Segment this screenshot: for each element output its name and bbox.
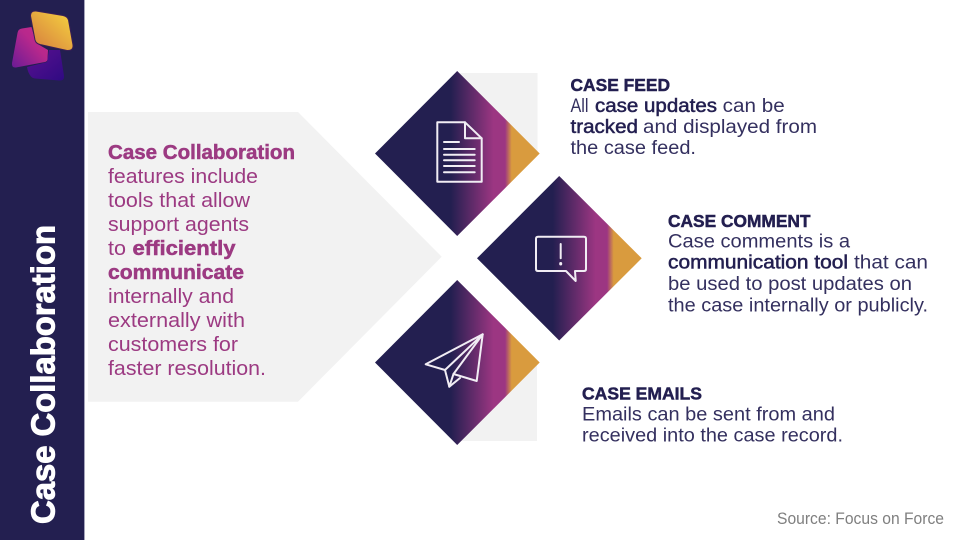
intro text: features include — [108, 165, 258, 188]
icon: document — [437, 122, 482, 182]
intro text: customers for — [108, 333, 238, 356]
text block: case feed — [570, 75, 817, 159]
backing square: case emails — [457, 362, 537, 441]
icon: speech bubble with exclamation mark — [536, 237, 586, 281]
text block: case feed: All — [570, 96, 588, 117]
icon: paper plane — [426, 334, 483, 387]
panel: intro arrow — [88, 112, 442, 402]
intro text: to — [108, 237, 126, 260]
diamond: case comment — [477, 176, 642, 340]
intro text: support agents — [108, 213, 249, 236]
text block: case emails: received into the case record. — [582, 426, 843, 446]
icon: logo of stacked cards — [12, 11, 73, 81]
text block: case comment — [668, 211, 928, 316]
source note: Source: Focus on Force — [777, 510, 944, 528]
text block: case emails — [582, 384, 843, 446]
intro text: tools that allow — [108, 189, 250, 212]
text block: case feed: CASE FEED — [570, 75, 670, 95]
intro text: externally with — [108, 309, 245, 332]
text block: case emails: CASE EMAILS — [582, 384, 702, 404]
text block: case feed: and displayed from — [643, 117, 817, 138]
text block: case comment: Case comments is a — [668, 232, 850, 252]
text block: case comment: CASE COMMENT — [668, 211, 811, 231]
text block: case feed: case updates — [595, 96, 717, 117]
text block: case emails: Emails can be sent from and — [582, 404, 835, 426]
intro text: Case Collaboration — [108, 141, 295, 164]
intro text: internally and — [108, 285, 234, 308]
text block: case feed: can be — [723, 96, 785, 117]
text block: case comment: be used to post updates on — [668, 274, 912, 295]
intro text — [108, 141, 295, 380]
text block: case feed: the case feed. — [570, 138, 696, 159]
text block: case comment: that can — [854, 252, 928, 274]
text block: case feed: tracked — [570, 117, 638, 138]
backing square: case feed — [457, 73, 538, 153]
diamond: case emails — [375, 280, 540, 445]
intro text: communicate — [108, 261, 244, 284]
diamond: case feed — [375, 71, 540, 236]
sidebar — [0, 0, 85, 540]
text block: case comment: communication tool — [668, 252, 848, 274]
sidebar title: Case Collaboration — [24, 225, 62, 524]
intro text: efficiently — [132, 237, 236, 260]
text block: case comment: the case internally or publicly. — [668, 296, 928, 316]
intro text: faster resolution. — [108, 357, 266, 380]
